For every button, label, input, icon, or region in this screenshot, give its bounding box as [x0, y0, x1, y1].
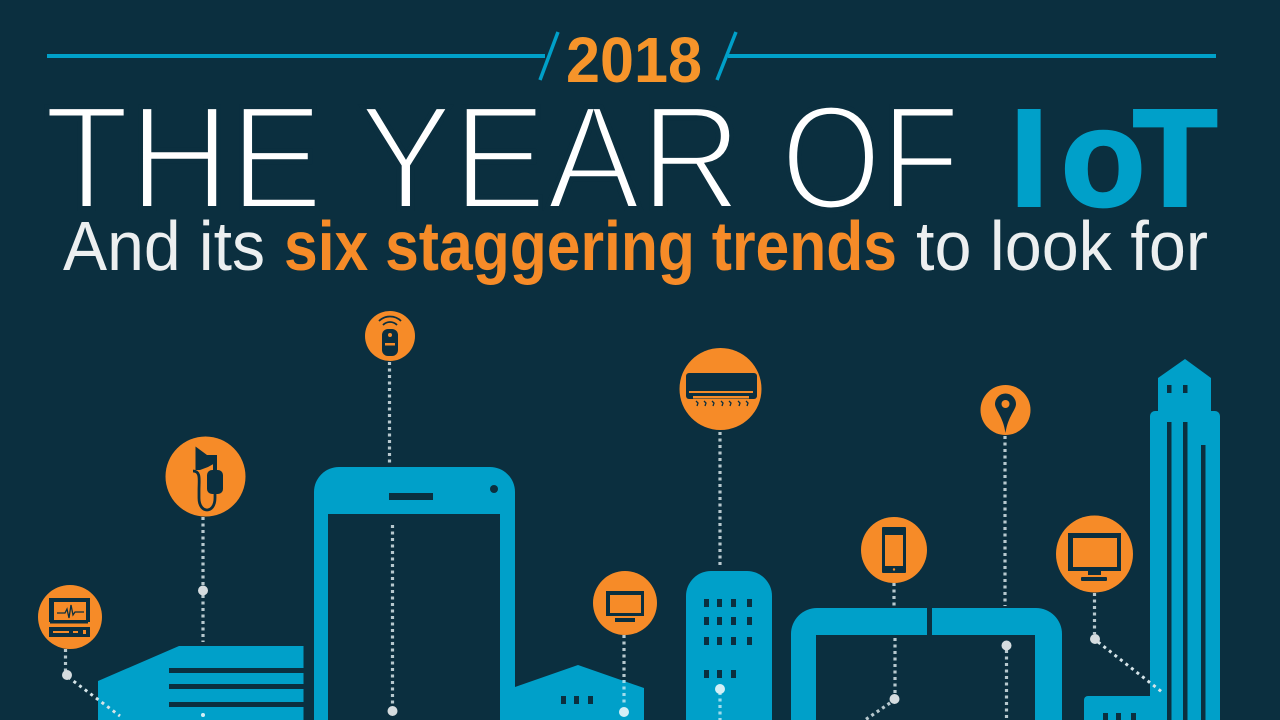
building: left block with slats — [98, 646, 304, 720]
building: skyscraper — [1150, 359, 1220, 720]
connector: screen — [619, 635, 629, 717]
connector: desktop — [1090, 593, 1162, 692]
icon: remote control — [365, 311, 415, 361]
subtitle: to look for — [916, 207, 1208, 285]
icon: air conditioner — [680, 348, 762, 430]
subtitle — [63, 207, 1208, 285]
connector: patient monitor — [62, 649, 120, 716]
title: the year of — [44, 76, 960, 240]
icon: smartphone — [861, 517, 927, 583]
connector: location pin — [1002, 436, 1012, 720]
connector: mobile — [865, 583, 900, 720]
title: the year of: YEAR — [359, 76, 742, 240]
year heading: 2018 — [566, 24, 702, 96]
building: tablet frame — [791, 608, 1062, 720]
icon: desktop monitor — [1056, 516, 1133, 592]
title: the year of: OF — [781, 76, 960, 240]
title: the year of: THE — [44, 76, 323, 240]
connector: anaesthesia mask — [198, 517, 208, 717]
building: low annex — [1084, 696, 1150, 720]
icon: small screen — [593, 571, 657, 635]
connector: air conditioner — [715, 432, 725, 720]
year rule with slashes — [47, 32, 1216, 80]
building: low house — [515, 665, 644, 720]
connector: remote — [388, 362, 398, 716]
subtitle: six staggering trends — [284, 207, 897, 285]
building: office tower — [686, 571, 772, 720]
building: smartphone — [314, 467, 515, 720]
icon: location pin — [980, 385, 1030, 435]
subtitle: And its — [63, 207, 265, 285]
icon: anaesthesia mask — [166, 436, 246, 516]
icon: patient monitor — [38, 585, 102, 649]
title: IoT: IoT — [1010, 82, 1217, 236]
